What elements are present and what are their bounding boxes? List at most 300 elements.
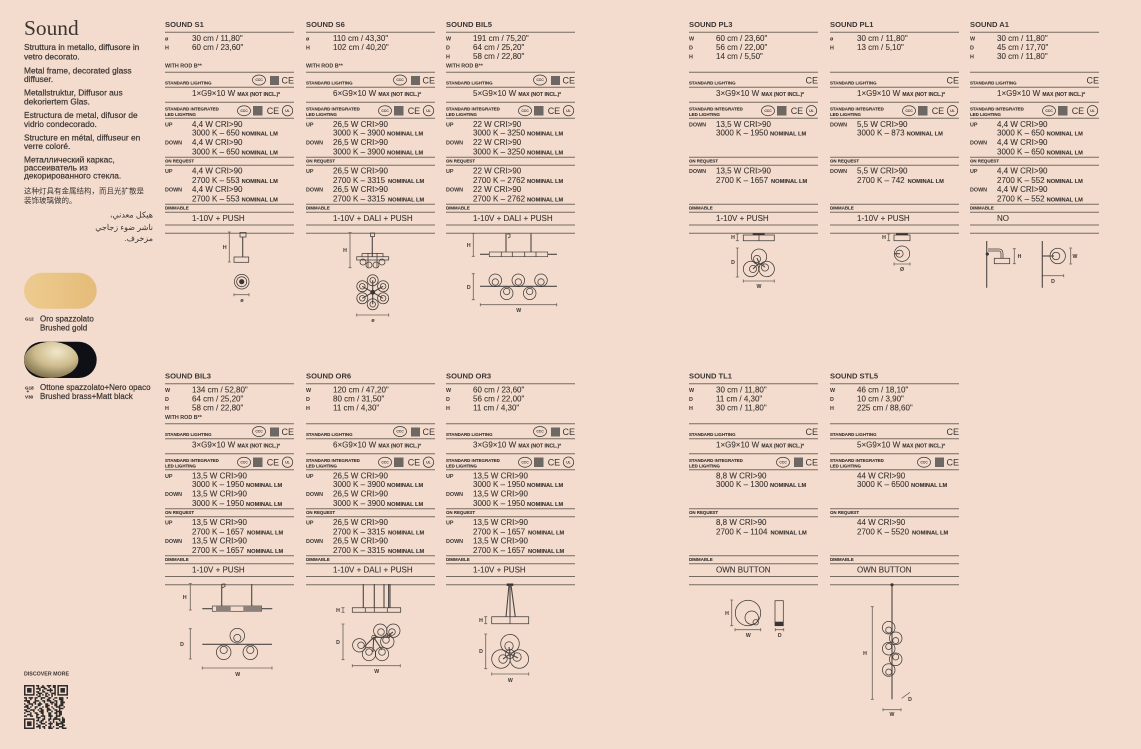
panel: SOUND PL1 bbox=[830, 20, 959, 273]
integrated LED values bbox=[165, 120, 278, 156]
dimmable value: NO bbox=[997, 214, 1009, 223]
on request values: UP bbox=[165, 169, 173, 175]
certification icons: integrated: CE bbox=[267, 106, 279, 116]
diagram: STL5: W bbox=[890, 712, 895, 718]
integrated LED heading: STANDARD INTEGRATED bbox=[830, 106, 884, 111]
certification icons: integrated: CE bbox=[932, 106, 944, 116]
on request values: 2700 K – 552 NOMINAL LM bbox=[997, 194, 1083, 203]
dimmable heading: DIMMABLE bbox=[689, 557, 713, 562]
certification icons: integrated bbox=[776, 457, 818, 468]
certification icons: integrated: CE bbox=[806, 458, 818, 468]
finish codes: G18 bbox=[25, 385, 34, 390]
integrated LED heading: STANDARD INTEGRATED bbox=[165, 458, 219, 463]
dimensions: 30 cm / 11,80" bbox=[716, 404, 767, 412]
dimmable heading: DIMMABLE bbox=[970, 206, 994, 211]
certification icons: integrated: UL bbox=[1090, 109, 1095, 113]
certification icons: integrated bbox=[902, 106, 958, 116]
on request values: 26,5 W CRI>90 bbox=[333, 518, 388, 527]
integrated LED heading: LED LIGHTING bbox=[970, 112, 1002, 117]
finish swatch: brushed gold bbox=[24, 273, 97, 332]
on request values: DOWN bbox=[689, 169, 706, 175]
dimensions: H bbox=[689, 54, 693, 60]
diagram: A1: W bbox=[1073, 254, 1078, 260]
diagram: S6 bbox=[343, 232, 389, 324]
description: Russian: рассеиватель из bbox=[24, 163, 88, 173]
on request values: 2700 K – 5520 NOMINAL LM bbox=[857, 528, 949, 536]
dimmable value: 1-10V + PUSH bbox=[192, 214, 245, 223]
diagram: S6: ø bbox=[371, 318, 375, 324]
on request values bbox=[857, 518, 949, 536]
discover more label: DISCOVER MORE bbox=[24, 672, 69, 678]
on request values: 26,5 W CRI>90 bbox=[333, 167, 388, 176]
model name: SOUND BIL3 bbox=[165, 372, 211, 380]
dimensions: D bbox=[165, 397, 169, 403]
title: Sound bbox=[24, 16, 79, 40]
integrated LED values: UP bbox=[446, 474, 454, 480]
certification icons: integrated bbox=[518, 457, 574, 468]
dimensions: H bbox=[165, 406, 169, 412]
standard lighting heading: STANDARD LIGHTING bbox=[306, 80, 353, 85]
dimmable heading: DIMMABLE bbox=[306, 557, 330, 562]
on request values: 2700 K – 3315 NOMINAL LM bbox=[333, 546, 425, 555]
certification icons: integrated: UL bbox=[285, 109, 290, 113]
on request heading: ON REQUEST bbox=[970, 159, 999, 164]
integrated LED heading: STANDARD INTEGRATED bbox=[970, 106, 1024, 111]
on request values: DOWN bbox=[165, 539, 182, 545]
panel: SOUND TL1 bbox=[689, 372, 818, 639]
finish code: G12 bbox=[25, 316, 34, 322]
on request heading: ON REQUEST bbox=[306, 159, 335, 164]
on request values: 5,5 W CRI>90 bbox=[857, 167, 908, 176]
standard lighting heading: STANDARD LIGHTING bbox=[689, 80, 736, 85]
integrated LED values: 4,4 W CRI>90 bbox=[192, 138, 243, 147]
on request values bbox=[165, 167, 278, 203]
integrated LED values: 13,5 W CRI>90 bbox=[192, 490, 247, 498]
diagram: TL1 bbox=[725, 600, 784, 639]
finish name: Brushed gold bbox=[40, 323, 87, 332]
on request values: UP bbox=[446, 169, 454, 175]
integrated LED heading: STANDARD INTEGRATED bbox=[306, 458, 360, 463]
dimensions: D bbox=[689, 46, 693, 52]
integrated LED values: 3000 K – 650 NOMINAL LM bbox=[192, 147, 278, 156]
sidebar: product intro bbox=[24, 16, 153, 243]
on request values bbox=[306, 167, 425, 203]
integrated LED heading: LED LIGHTING bbox=[306, 464, 338, 468]
dimensions bbox=[689, 386, 767, 412]
standard lighting value: 1×G9×10 W MAX (NOT INCL.)* bbox=[192, 89, 280, 98]
certification icons: standard: CCC bbox=[536, 78, 544, 82]
integrated LED values: DOWN bbox=[689, 122, 706, 128]
on request values: 2700 K – 742 NOMINAL LM bbox=[857, 176, 944, 185]
on request values: UP bbox=[165, 521, 173, 527]
diagram: S6: H bbox=[343, 248, 347, 254]
on request heading: ON REQUEST bbox=[446, 159, 475, 164]
certification icons: integrated: UL bbox=[426, 460, 431, 464]
dimensions bbox=[689, 34, 767, 61]
integrated LED heading: STANDARD INTEGRATED bbox=[830, 458, 884, 463]
integrated LED values: 26,5 W CRI>90 bbox=[333, 138, 388, 147]
certification icons: standard: CCC bbox=[255, 430, 263, 434]
dimensions bbox=[970, 34, 1048, 61]
diagram: STL5: H bbox=[863, 651, 867, 657]
on request values: DOWN bbox=[446, 539, 463, 545]
certification icons: standard: CE bbox=[422, 427, 435, 437]
dimmable heading: DIMMABLE bbox=[830, 206, 854, 211]
integrated LED values: 3000 K – 3900 NOMINAL LM bbox=[333, 499, 424, 508]
on request values: 13,5 W CRI>90 bbox=[192, 536, 247, 546]
certification icons: integrated: CE bbox=[1072, 106, 1084, 116]
integrated LED values bbox=[830, 120, 943, 138]
on request values: 2700 K – 2762 NOMINAL LM bbox=[473, 176, 564, 185]
on request heading: ON REQUEST bbox=[165, 510, 194, 515]
rod note: WITH ROD B** bbox=[306, 64, 344, 70]
on request values: 2700 K – 1657 NOMINAL LM bbox=[473, 546, 565, 555]
integrated LED heading: LED LIGHTING bbox=[830, 112, 862, 117]
integrated LED values: 8,8 W CRI>90 bbox=[716, 472, 767, 480]
dimensions: 56 cm / 22,00" bbox=[716, 43, 767, 52]
dimensions: 64 cm / 25,20" bbox=[473, 43, 524, 52]
on request values: 2700 K – 553 NOMINAL LM bbox=[192, 194, 278, 203]
certification icon: CE: CE bbox=[1086, 76, 1099, 86]
integrated LED values: UP bbox=[446, 122, 454, 128]
dimensions: W bbox=[830, 388, 836, 394]
integrated LED values: 5,5 W CRI>90 bbox=[857, 120, 908, 129]
dimensions: W bbox=[446, 388, 452, 394]
dimmable value: 1-10V + PUSH bbox=[857, 214, 910, 223]
standard lighting heading: STANDARD LIGHTING bbox=[306, 432, 353, 437]
dimmable value: 1-10V + PUSH bbox=[716, 214, 769, 223]
dimensions: H bbox=[970, 54, 974, 60]
integrated LED values: UP bbox=[306, 122, 314, 128]
on request values: 2700 K – 1657 NOMINAL LM bbox=[716, 176, 808, 185]
integrated LED values: 3000 K – 3900 NOMINAL LM bbox=[333, 480, 424, 489]
description: French: Structure en métal, diffuseur en bbox=[24, 132, 140, 142]
on request values: 2700 K – 553 NOMINAL LM bbox=[192, 176, 278, 185]
on request values: 2700 K – 1657 NOMINAL LM bbox=[473, 528, 565, 536]
dimensions: 30 cm / 11,80" bbox=[857, 34, 908, 43]
diagram: A1 bbox=[986, 241, 1078, 288]
certification icons: integrated: UL bbox=[566, 460, 571, 464]
dimmable value: OWN BUTTON bbox=[857, 566, 912, 574]
dimensions: 58 cm / 22,80" bbox=[473, 52, 524, 61]
dimensions: 11 cm / 4,30" bbox=[333, 404, 379, 412]
dimensions bbox=[446, 34, 529, 61]
description: Spanish: vidrio condecorado. bbox=[24, 119, 97, 129]
standard lighting value: 6×G9×10 W MAX (NOT INCL.)* bbox=[333, 440, 421, 450]
standard lighting heading: STANDARD LIGHTING bbox=[830, 80, 877, 85]
on request values: 2700 K – 3315 NOMINAL LM bbox=[333, 528, 425, 536]
certification icons: integrated bbox=[238, 457, 293, 468]
dimensions: D bbox=[446, 46, 450, 52]
dimensions: H bbox=[446, 406, 450, 412]
diagram: BIL5: D bbox=[467, 285, 471, 291]
on request heading: ON REQUEST bbox=[830, 159, 859, 164]
on request values: DOWN bbox=[446, 188, 463, 194]
integrated LED values bbox=[446, 472, 564, 508]
dimmable heading: DIMMABLE bbox=[446, 557, 470, 562]
integrated LED values: 26,5 W CRI>90 bbox=[333, 490, 388, 498]
dimensions: 30 cm / 11,80" bbox=[997, 34, 1048, 43]
certification icons: integrated: CCC bbox=[381, 460, 389, 464]
integrated LED values: 3000 K – 3900 NOMINAL LM bbox=[333, 147, 424, 156]
integrated LED values: 3000 K – 873 NOMINAL LM bbox=[857, 129, 943, 138]
panel: SOUND A1 bbox=[970, 20, 1099, 288]
description: Arabic: هيكل معدني، bbox=[110, 210, 153, 220]
certification icons: standard: CCC bbox=[536, 430, 544, 434]
description: English: diffuser. bbox=[24, 74, 53, 84]
diagram: BIL3 bbox=[180, 584, 272, 678]
on request values: 13,5 W CRI>90 bbox=[473, 518, 528, 527]
standard lighting value: 6×G9×10 W MAX (NOT INCL.)* bbox=[333, 89, 421, 98]
dimensions: D bbox=[689, 397, 693, 403]
on request heading: ON REQUEST bbox=[830, 510, 859, 515]
diagram: OR6: D bbox=[336, 640, 340, 646]
standard lighting heading: STANDARD LIGHTING bbox=[165, 80, 212, 85]
diagram: OR3: H bbox=[479, 618, 483, 624]
diagram: S1: ø bbox=[240, 298, 244, 304]
dimensions: 30 cm / 11,80" bbox=[997, 52, 1048, 61]
dimensions: H bbox=[830, 46, 834, 52]
description: Arabic: مزخرف. bbox=[124, 234, 153, 243]
integrated LED values bbox=[306, 472, 424, 508]
dimensions: W bbox=[446, 36, 452, 42]
panel: SOUND S6 bbox=[306, 20, 435, 324]
on request values: 2700 K – 552 NOMINAL LM bbox=[997, 176, 1083, 185]
on request values: 44 W CRI>90 bbox=[857, 518, 906, 527]
description: German: Metallstruktur, Diffusor aus bbox=[24, 87, 123, 97]
dimensions: D bbox=[970, 46, 974, 52]
certification icons: integrated: CCC bbox=[521, 109, 529, 113]
finish name: Oro spazzolato bbox=[40, 314, 94, 323]
standard lighting value: 1×G9×10 W MAX (NOT INCL.)* bbox=[857, 89, 945, 98]
dimensions bbox=[306, 34, 389, 52]
integrated LED values: 3000 K – 6500 NOMINAL LM bbox=[857, 480, 948, 489]
on request values: UP bbox=[306, 521, 314, 527]
dimensions: ø bbox=[165, 36, 169, 42]
integrated LED values: 3000 K – 1950 NOMINAL LM bbox=[473, 480, 564, 489]
dimensions: ø bbox=[830, 36, 834, 42]
on request values: UP bbox=[446, 521, 454, 527]
dimensions: 56 cm / 22,00" bbox=[473, 394, 524, 404]
integrated LED heading: LED LIGHTING bbox=[830, 464, 862, 468]
diagram: BIL3: H bbox=[183, 595, 187, 601]
on request values: 2700 K – 1657 NOMINAL LM bbox=[192, 546, 284, 555]
model name: SOUND OR3 bbox=[446, 372, 491, 380]
certification icons: integrated: UL bbox=[566, 109, 571, 113]
certification icons: integrated bbox=[378, 106, 434, 116]
description: Chinese: 这种灯具有金属结构，而且光扩散是 bbox=[24, 186, 144, 196]
dimensions: ø bbox=[306, 36, 310, 42]
panel: SOUND S1 bbox=[165, 20, 294, 304]
certification icons: integrated: CCC bbox=[779, 460, 787, 464]
on request values bbox=[830, 167, 944, 185]
diagram: BIL5: W bbox=[516, 308, 521, 314]
dimmable value: 1-10V + PUSH bbox=[473, 566, 526, 574]
rod note: WITH ROD B** bbox=[446, 64, 484, 70]
on request values bbox=[446, 167, 564, 203]
certification icons: integrated bbox=[238, 106, 293, 116]
integrated LED values: DOWN bbox=[306, 140, 323, 146]
dimmable heading: DIMMABLE bbox=[689, 206, 713, 211]
integrated LED values: 3000 K – 3900 NOMINAL LM bbox=[333, 129, 424, 138]
integrated LED values: 22 W CRI>90 bbox=[473, 120, 522, 129]
dimensions: 45 cm / 17,70" bbox=[997, 43, 1048, 52]
integrated LED values: 3000 K – 3250 NOMINAL LM bbox=[473, 147, 564, 156]
rod note: WITH ROD B** bbox=[165, 64, 203, 70]
standard lighting value: 5×G9×10 W MAX (NOT INCL.)* bbox=[857, 440, 945, 450]
dimensions: 64 cm / 25,20" bbox=[192, 394, 243, 404]
dimensions: W bbox=[970, 36, 976, 42]
certification icons: integrated bbox=[762, 106, 817, 116]
dimmable heading: DIMMABLE bbox=[446, 206, 470, 211]
integrated LED values: 3000 K – 1950 NOMINAL LM bbox=[192, 499, 283, 508]
on request values: DOWN bbox=[970, 188, 987, 194]
on request values: DOWN bbox=[306, 539, 323, 545]
certification icons: standard: CE bbox=[422, 76, 435, 86]
standard lighting heading: STANDARD LIGHTING bbox=[970, 80, 1017, 85]
model name: SOUND PL3 bbox=[689, 20, 732, 29]
dimensions: 110 cm / 43,30" bbox=[333, 34, 388, 43]
description: French: verre coloré. bbox=[24, 141, 70, 151]
standard lighting heading: STANDARD LIGHTING bbox=[165, 432, 212, 437]
integrated LED heading: STANDARD INTEGRATED bbox=[446, 106, 500, 111]
dimensions: 134 cm / 52,80" bbox=[192, 386, 248, 394]
description: Russian: Металлический каркас, bbox=[24, 154, 115, 164]
standard lighting value: 1×G9×10 W MAX (NOT INCL.)* bbox=[997, 89, 1085, 98]
diagram: S1: H bbox=[223, 245, 227, 251]
model name: SOUND PL1 bbox=[830, 20, 874, 29]
diagram: OR6: H bbox=[336, 608, 340, 614]
model name: SOUND TL1 bbox=[689, 372, 733, 380]
dimensions: 11 cm / 4,30" bbox=[473, 404, 519, 412]
integrated LED values: 13,5 W CRI>90 bbox=[473, 472, 528, 480]
certification icons: integrated: CCC bbox=[521, 460, 529, 464]
dimensions bbox=[165, 34, 243, 52]
dimmable value: 1-10V + PUSH bbox=[192, 566, 245, 574]
model name: SOUND S6 bbox=[306, 20, 345, 29]
finish codes: + bbox=[26, 389, 30, 394]
certification icons: standard: CE bbox=[282, 76, 294, 86]
integrated LED values bbox=[857, 472, 948, 489]
integrated LED values: DOWN bbox=[165, 140, 182, 146]
integrated LED heading: STANDARD INTEGRATED bbox=[689, 458, 743, 463]
integrated LED values: 3000 K – 1950 NOMINAL LM bbox=[716, 129, 807, 138]
integrated LED values bbox=[446, 120, 564, 156]
description: Spanish: Estructura de metal, difusor de bbox=[24, 110, 138, 120]
dimmable heading: DIMMABLE bbox=[165, 206, 189, 211]
on request values bbox=[306, 518, 425, 555]
model name: SOUND S1 bbox=[165, 20, 205, 29]
on request values: UP bbox=[306, 169, 314, 175]
integrated LED values: UP bbox=[165, 474, 173, 480]
certification icons: integrated: CE bbox=[548, 106, 560, 116]
certification icons: integrated: CE bbox=[267, 458, 279, 468]
integrated LED heading: LED LIGHTING bbox=[165, 464, 197, 468]
dimmable value: 1-10V + DALI + PUSH bbox=[333, 566, 413, 574]
on request values bbox=[689, 167, 808, 185]
certification icons: integrated: CCC bbox=[240, 109, 248, 113]
on request values: 2700 K – 3315 NOMINAL LM bbox=[333, 176, 425, 185]
certification icons: integrated: UL bbox=[950, 109, 955, 113]
standard lighting value: 1×G9×10 W MAX (NOT INCL.)* bbox=[716, 440, 804, 450]
on request values: 13,5 W CRI>90 bbox=[192, 518, 247, 527]
integrated LED values: DOWN bbox=[306, 492, 323, 498]
QR block bbox=[24, 672, 69, 729]
on request values: 8,8 W CRI>90 bbox=[716, 518, 767, 527]
certification icons: standard: CCC bbox=[396, 430, 404, 434]
panel: SOUND OR3 bbox=[446, 372, 575, 684]
dimensions: 11 cm / 4,30" bbox=[716, 394, 762, 404]
certification icons: integrated: CCC bbox=[920, 460, 928, 464]
dimensions: 60 cm / 23,60" bbox=[473, 386, 524, 394]
diagram: PL3: D bbox=[731, 260, 735, 266]
on request values: 13,5 W CRI>90 bbox=[473, 536, 528, 546]
diagram: PL1: H bbox=[882, 235, 886, 241]
finish codes: V30 bbox=[25, 394, 34, 399]
dimensions: H bbox=[830, 406, 834, 412]
diagram: STL5: D bbox=[908, 697, 912, 703]
diagram: TL1: D bbox=[778, 633, 782, 639]
certification icons: standard: CE bbox=[282, 427, 294, 437]
on request values: 2700 K – 2762 NOMINAL LM bbox=[473, 194, 564, 203]
dimensions: D bbox=[446, 397, 450, 403]
dimensions: 14 cm / 5,50" bbox=[716, 52, 763, 61]
standard lighting heading: STANDARD LIGHTING bbox=[446, 80, 493, 85]
certification icons: standard: CE bbox=[562, 427, 575, 437]
standard lighting value: 3×G9×10 W MAX (NOT INCL.)* bbox=[192, 440, 280, 450]
description: German: dekoriertem Glas. bbox=[24, 96, 90, 106]
on request values: 4,4 W CRI>90 bbox=[192, 167, 243, 176]
standard lighting heading: STANDARD LIGHTING bbox=[689, 432, 736, 437]
dimmable value: 1-10V + DALI + PUSH bbox=[333, 214, 413, 223]
standard lighting value: 3×G9×10 W MAX (NOT INCL.)* bbox=[716, 89, 804, 98]
integrated LED heading: STANDARD INTEGRATED bbox=[165, 106, 219, 111]
integrated LED values: DOWN bbox=[446, 492, 463, 498]
integrated LED heading: LED LIGHTING bbox=[446, 112, 478, 117]
integrated LED heading: STANDARD INTEGRATED bbox=[446, 458, 500, 463]
certification icons: integrated: CCC bbox=[381, 109, 389, 113]
description: Russian: декорированного стекла. bbox=[24, 171, 121, 181]
integrated LED values: 3000 K – 650 NOMINAL LM bbox=[997, 147, 1083, 156]
dimensions: 58 cm / 22,80" bbox=[192, 404, 243, 412]
on request values: 26,5 W CRI>90 bbox=[333, 536, 388, 546]
diagram: A1: H bbox=[1018, 254, 1022, 260]
integrated LED values: 4,4 W CRI>90 bbox=[997, 120, 1048, 129]
diagram: BIL5: H bbox=[467, 243, 471, 249]
dimensions bbox=[830, 34, 908, 52]
certification icon: CE: CE bbox=[946, 427, 959, 437]
on request values: 2700 K – 3315 NOMINAL LM bbox=[333, 194, 425, 203]
integrated LED values: UP bbox=[970, 122, 978, 128]
diagram: OR3: W bbox=[508, 678, 513, 684]
panel: SOUND BIL3 bbox=[165, 372, 294, 678]
on request values: UP bbox=[970, 169, 978, 175]
finish swatch: brushed brass and matt black bbox=[24, 342, 151, 401]
dimensions bbox=[830, 386, 913, 412]
integrated LED heading: LED LIGHTING bbox=[446, 464, 478, 468]
certification icons: integrated bbox=[518, 106, 574, 116]
certification icons: standard bbox=[534, 75, 575, 86]
panel: SOUND BIL5 bbox=[446, 20, 575, 314]
integrated LED heading: LED LIGHTING bbox=[689, 464, 721, 468]
certification icons: standard: CCC bbox=[396, 78, 404, 82]
dimmable heading: DIMMABLE bbox=[830, 557, 854, 562]
on request values bbox=[446, 518, 565, 555]
certification icons: integrated: CCC bbox=[764, 109, 772, 113]
dimensions bbox=[165, 386, 248, 412]
certification icons: integrated: CE bbox=[408, 106, 420, 116]
diagram: TL1: W bbox=[746, 633, 751, 639]
